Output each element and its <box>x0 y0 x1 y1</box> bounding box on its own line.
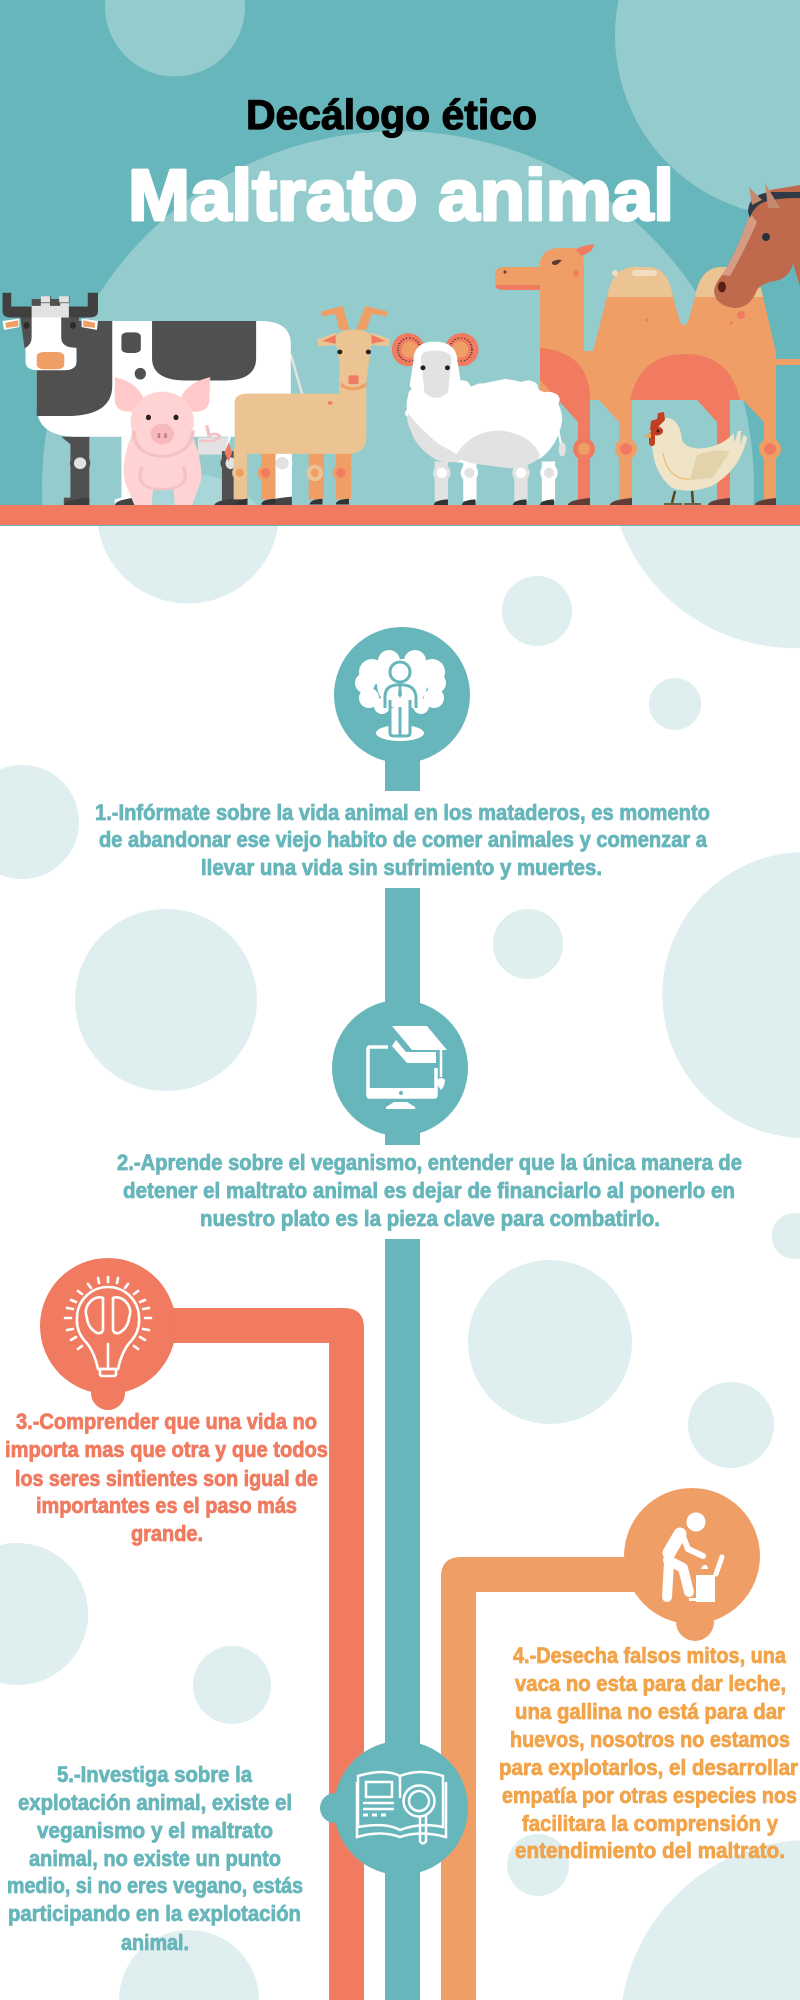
text block 5 <box>7 1762 303 1955</box>
text block 4 <box>499 1643 798 1863</box>
step 1 icon <box>334 627 470 763</box>
text block 1: de abandonar ese viejo habito de comer animales y comenzar a <box>99 827 708 852</box>
illustration: cow <box>3 293 302 506</box>
step 2 icon <box>332 1000 468 1136</box>
text block 1: 1.-Infórmate sobre la vida animal en los mataderos, es momento <box>95 800 710 825</box>
text block 3: importa mas que otra y que todos <box>5 1437 328 1462</box>
text block 1: llevar una vida sin sufrimiento y muertes. <box>201 855 602 880</box>
step 3 icon <box>40 1258 176 1410</box>
illustration: pig <box>115 377 219 507</box>
text block 4: entendimiento del maltrato. <box>515 1838 785 1863</box>
heading: Decálogo ético: Decálogo ético <box>246 91 537 138</box>
background dots <box>0 526 800 2000</box>
text block 2: detener el maltrato animal es dejar de financiarlo al ponerlo en <box>123 1178 735 1203</box>
text block 5: medio, si no eres vegano, estás <box>7 1873 303 1898</box>
text block 3: grande. <box>131 1521 203 1546</box>
step 4 icon <box>624 1488 760 1641</box>
illustration: goat <box>224 306 390 505</box>
text block 5: 5.-Investiga sobre la <box>57 1762 253 1787</box>
text block 3: los seres sintientes son igual de <box>15 1466 318 1491</box>
text block 1 <box>95 800 710 880</box>
text block 2 <box>117 1150 742 1231</box>
text block 3 <box>5 1409 328 1546</box>
timeline stem: teal <box>385 720 420 2000</box>
illustration: horse <box>714 183 800 308</box>
text block 3: 3.-Comprender que una vida no <box>16 1409 317 1434</box>
illustration: camel <box>495 246 800 505</box>
text block 5: animal. <box>121 1930 189 1955</box>
step 5 icon <box>320 1741 468 1875</box>
text block 5: animal, no existe un punto <box>29 1846 281 1871</box>
text block 5: participando en la explotación <box>8 1901 301 1926</box>
text block 5: explotación animal, existe el <box>18 1790 292 1815</box>
ground band <box>0 505 800 525</box>
text block 2: 2.-Aprende sobre el veganismo, entender que la única manera de <box>117 1150 742 1175</box>
connector: coral <box>108 1308 364 2000</box>
text block 5: veganismo y el maltrato <box>37 1818 273 1843</box>
illustration: ram <box>392 333 566 506</box>
illustration: hen <box>643 412 747 504</box>
text block 4: una gallina no está para dar <box>515 1699 785 1724</box>
header panel <box>0 0 800 526</box>
connector: orange <box>441 1557 692 2000</box>
text block 2: nuestro plato es la pieza clave para combatirlo. <box>200 1206 660 1231</box>
text block 4: vaca no esta para dar leche, <box>515 1671 786 1696</box>
text block 4: facilitara la comprensión y <box>522 1811 779 1836</box>
heading: Maltrato animal: Maltrato animal <box>128 156 674 236</box>
text block 3: importantes es el paso más <box>36 1493 297 1518</box>
